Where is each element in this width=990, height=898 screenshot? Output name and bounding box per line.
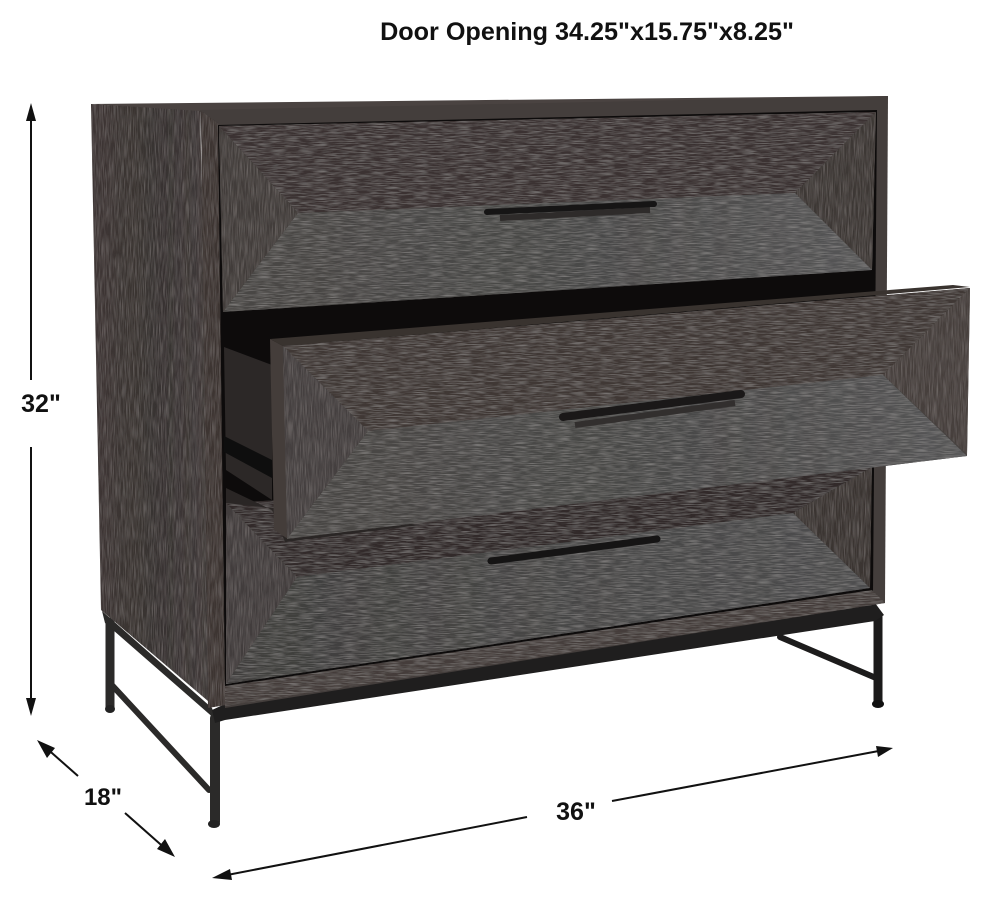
cabinet opening [218, 110, 877, 688]
top bevel [283, 288, 970, 431]
label: 18 inches: 18" [84, 784, 122, 811]
handle [563, 394, 741, 425]
metal base frame [102, 603, 884, 828]
cabinet top surface [91, 96, 888, 112]
handle shadow [575, 403, 735, 425]
handle [487, 204, 654, 218]
top bevel [226, 467, 872, 577]
cabinet body [91, 96, 888, 708]
drawer underlay [219, 112, 876, 312]
right bevel [793, 467, 872, 588]
bottom drawer [226, 467, 872, 684]
cabinet side panel [91, 104, 215, 707]
drawer slide rail [224, 436, 272, 478]
top bevel [219, 112, 876, 213]
front frame left strip [201, 111, 226, 708]
bottom bevel [223, 193, 872, 312]
top lip [270, 285, 970, 346]
left bevel [283, 346, 368, 539]
dimension: width 36 inches [212, 746, 893, 880]
drawer interior side [224, 347, 272, 500]
label: 32 inches: 32" [21, 390, 61, 418]
right bevel [883, 288, 970, 454]
shadow on bottom drawer [226, 488, 420, 542]
left bevel [226, 503, 297, 684]
handle [491, 539, 657, 561]
dimension: height 32 inches [26, 103, 36, 716]
open middle drawer [224, 285, 970, 542]
cabinet front frame [200, 96, 888, 708]
drawer underlay [283, 288, 970, 539]
label: 36 inches: 36" [556, 798, 596, 826]
bottom frame rail [225, 590, 885, 706]
top drawer [219, 112, 876, 312]
right bevel [795, 112, 876, 270]
handle shadow [500, 210, 650, 218]
handle bar [487, 204, 654, 212]
bottom bevel [226, 513, 870, 684]
title: door opening dimensions: Door Opening 34.25"x15.75"x8.25" [380, 18, 794, 46]
bottom bevel [287, 375, 967, 539]
left edge [270, 339, 288, 539]
left bevel [219, 126, 298, 312]
dimension: depth 18 inches [37, 740, 175, 857]
drawer underlay [226, 467, 872, 684]
handle bar [563, 394, 741, 417]
